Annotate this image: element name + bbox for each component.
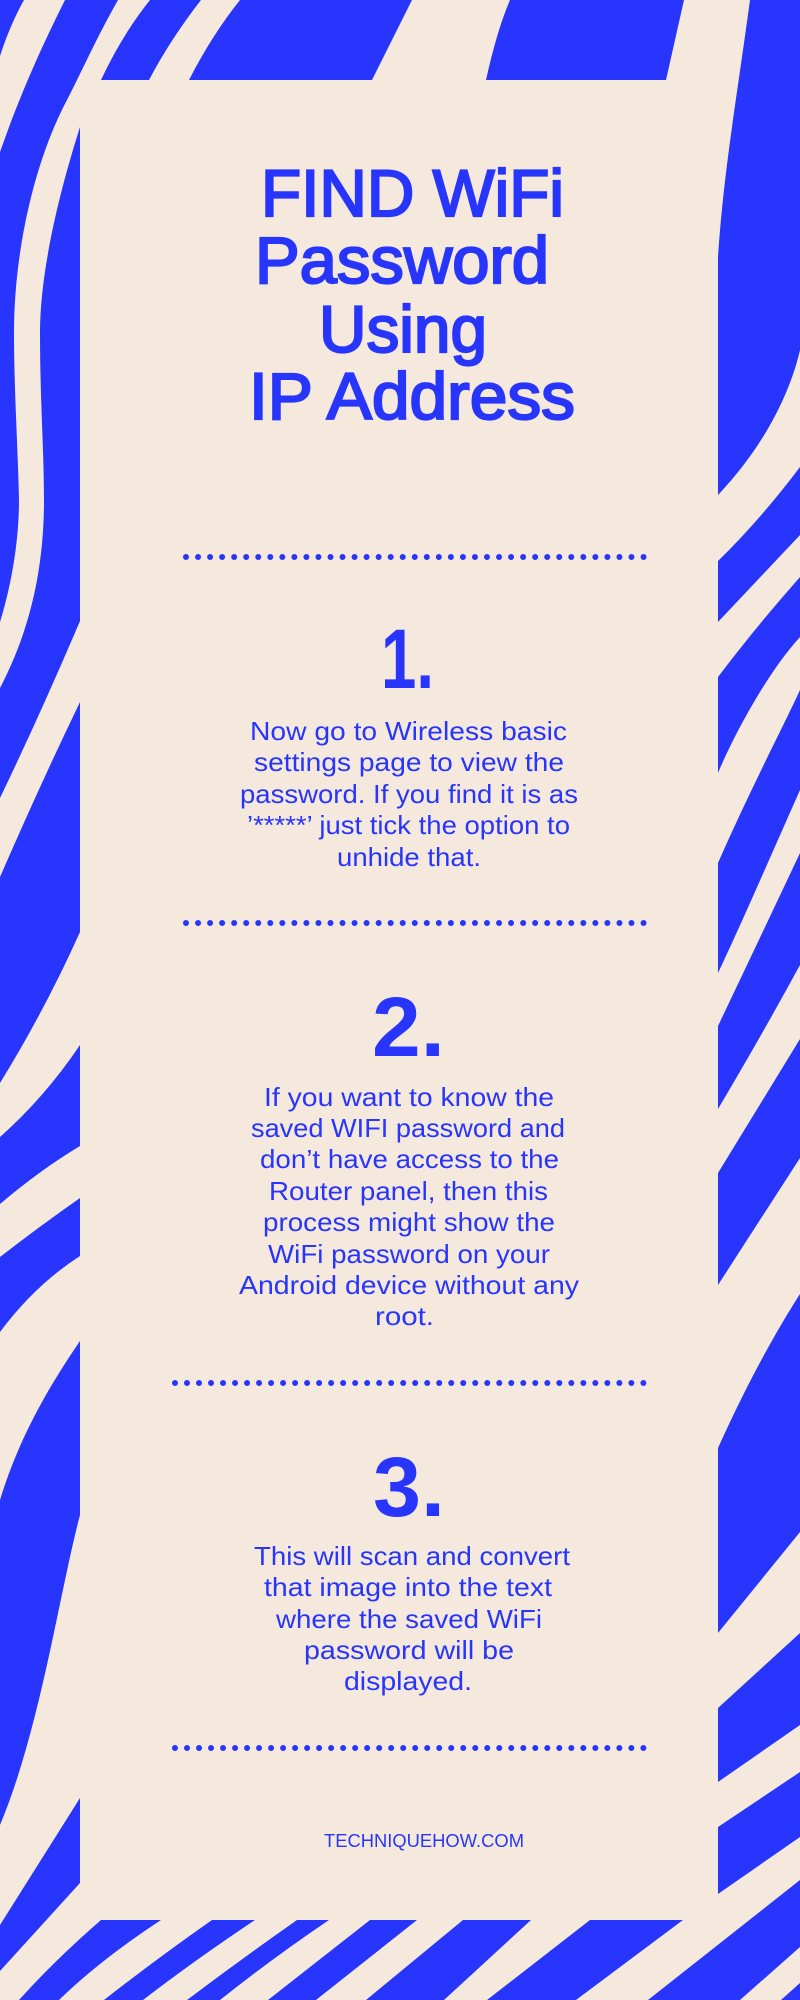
step 1 number: 1. <box>381 612 434 706</box>
step 1 text: ’*****’ just tick the option to <box>247 810 570 840</box>
step 2 text: process might show the <box>263 1207 555 1237</box>
divider: dotted line 1 <box>186 554 644 560</box>
footer website: TECHNIQUEHOW.COM <box>324 1831 524 1851</box>
step 3 text: password will be <box>304 1635 514 1665</box>
step 2 <box>239 980 579 1331</box>
step 2 text: If you want to know the <box>264 1082 554 1112</box>
step 2 text: WiFi password on your <box>268 1239 550 1269</box>
step 3 <box>254 1440 571 1696</box>
divider: dotted line 2 <box>186 920 644 926</box>
decorative border: bottom stripes <box>19 1880 800 2000</box>
step 1 text <box>240 716 578 872</box>
step 3 text: where the saved WiFi <box>275 1604 542 1634</box>
step 2 number: 2. <box>372 980 445 1074</box>
step 1 text: unhide that. <box>337 842 481 872</box>
step 2 text: Router panel, then this <box>269 1176 548 1206</box>
step 1 <box>240 612 578 872</box>
step 2 text: Android device without any <box>239 1270 579 1300</box>
title: FIND WiFi <box>261 156 564 230</box>
step 3 text <box>254 1541 571 1696</box>
step 2 text: saved WIFI password and <box>251 1113 565 1143</box>
step 3 text: that image into the text <box>264 1572 553 1602</box>
step 1 text: settings page to view the <box>254 747 564 777</box>
step 2 text <box>239 1082 579 1331</box>
decorative border: top stripes <box>101 0 684 80</box>
step 2 text: root. <box>375 1301 434 1331</box>
step 2 text: don’t have access to the <box>260 1144 559 1174</box>
step 3 number: 3. <box>373 1440 445 1534</box>
step 1 text: Now go to Wireless basic <box>250 716 567 746</box>
title: IP Address <box>249 359 575 433</box>
divider: dotted line 4 <box>175 1745 644 1751</box>
step 1 text: password. If you find it is as <box>240 779 578 809</box>
decorative border: left waves <box>0 0 118 1971</box>
title: Password <box>255 223 549 297</box>
title: Using <box>319 292 487 366</box>
step 3 text: displayed. <box>344 1666 472 1696</box>
title <box>249 156 575 433</box>
decorative border: right waves <box>718 0 800 1894</box>
divider: dotted line 3 <box>175 1380 644 1386</box>
step 3 text: This will scan and convert <box>254 1541 571 1571</box>
